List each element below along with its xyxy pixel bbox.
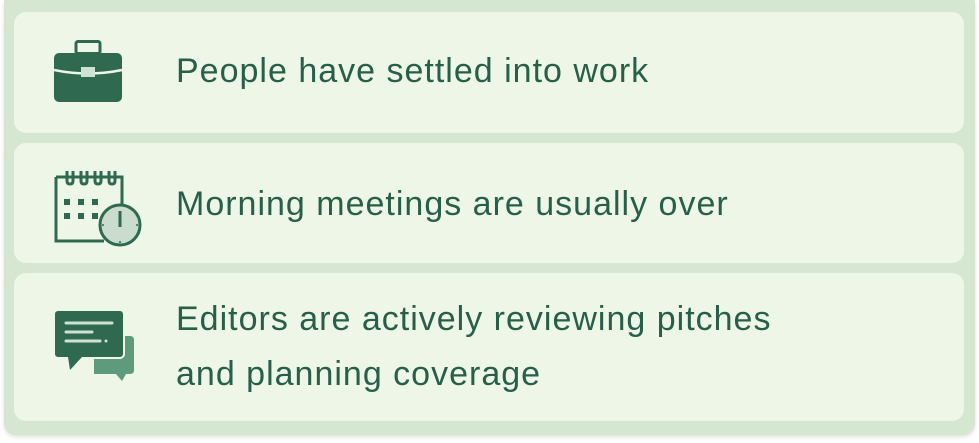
text (176, 300, 771, 393)
icon: chat bubbles (55, 311, 134, 381)
card: editors reviewing (14, 273, 964, 421)
icon: calendar with clock (54, 171, 142, 246)
text: and planning coverage (176, 355, 541, 393)
card: settled into work (14, 12, 964, 133)
text: Morning meetings are usually over (176, 185, 729, 223)
text: Editors are actively reviewing pitches (176, 300, 771, 338)
text: People have settled into work (176, 52, 649, 90)
icon: briefcase (54, 40, 122, 102)
card: morning meetings (14, 143, 964, 263)
